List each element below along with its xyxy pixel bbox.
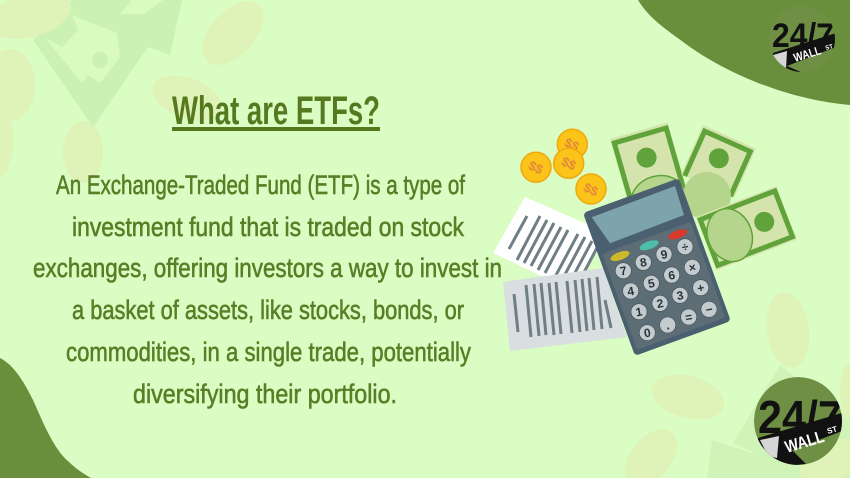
calculator keys: 3: [676, 288, 685, 303]
corner blob: bottom left: [0, 358, 91, 478]
icon: gold coins: $$: [559, 154, 579, 174]
calculator keys: 4: [626, 284, 636, 299]
icon: banknote middle: [681, 125, 756, 198]
title: What are ETFs?: [172, 89, 380, 133]
logo: 24/7 Wall St, top right: WALL: [792, 43, 823, 65]
corner blob: top right: [638, 0, 850, 105]
icon: gold coins: $$: [562, 135, 582, 155]
body text: investment fund that is traded on stock: [72, 212, 464, 242]
calculator keys: 0: [643, 325, 652, 340]
watermark: faded money and arrows, top left: [0, 0, 275, 183]
calculator keys: [609, 227, 717, 341]
body text: diversifying their portfolio.: [133, 379, 397, 409]
icon: gold coins: $$: [581, 180, 601, 200]
logo: 24/7 Wall St, bottom right: [754, 377, 845, 466]
calculator screen: [592, 186, 684, 243]
illustration: money, coins, receipts, calculator: [493, 122, 797, 356]
calculator keys: ÷: [681, 239, 690, 254]
calculator keys: 2: [656, 296, 665, 311]
logo: 24/7 Wall St, bottom right: 24/7: [758, 391, 842, 443]
calculator keys: 9: [660, 247, 669, 262]
logo: 24/7 Wall St, bottom right: WALL: [783, 427, 826, 457]
body text: a basket of assets, like stocks, bonds, or: [72, 295, 464, 325]
icon: banknote left: [610, 122, 694, 231]
body text: exchanges, offering investors a way to invest in: [33, 253, 502, 283]
calculator keys: ×: [688, 260, 697, 275]
logo: 24/7 Wall St, top right: [769, 6, 836, 73]
icon: white receipt: [493, 197, 605, 292]
icon: calculator: [583, 178, 731, 356]
logo: 24/7 Wall St, top right: 24/7: [772, 17, 834, 55]
icon: gold coins: $$: [526, 158, 546, 178]
title: [172, 89, 380, 133]
calculator keys: =: [684, 310, 693, 325]
icon: gold coins: [521, 129, 606, 204]
body text: [33, 170, 502, 409]
calculator keys: −: [704, 302, 714, 317]
icon: banknote right: [696, 186, 797, 270]
calculator keys: 8: [639, 255, 648, 270]
icon: banknote middle oval: [683, 172, 731, 220]
calculator keys: +: [696, 281, 705, 296]
logo: 24/7 Wall St, top right: ST: [825, 44, 834, 52]
calculator keys: 1: [634, 304, 644, 319]
calculator keys: 5: [647, 276, 656, 291]
watermark: faded money and arrows, bottom right: [615, 289, 850, 478]
icon: grey receipt: [503, 268, 627, 351]
body text: An Exchange-Traded Fund (ETF) is a type of: [56, 170, 465, 200]
calculator keys: .: [665, 318, 671, 333]
calculator keys: 6: [667, 268, 677, 283]
logo: 24/7 Wall St, bottom right: ST: [826, 424, 838, 436]
calculator keys: 7: [619, 263, 628, 278]
body text: commodities, in a single trade, potentially: [66, 337, 471, 367]
